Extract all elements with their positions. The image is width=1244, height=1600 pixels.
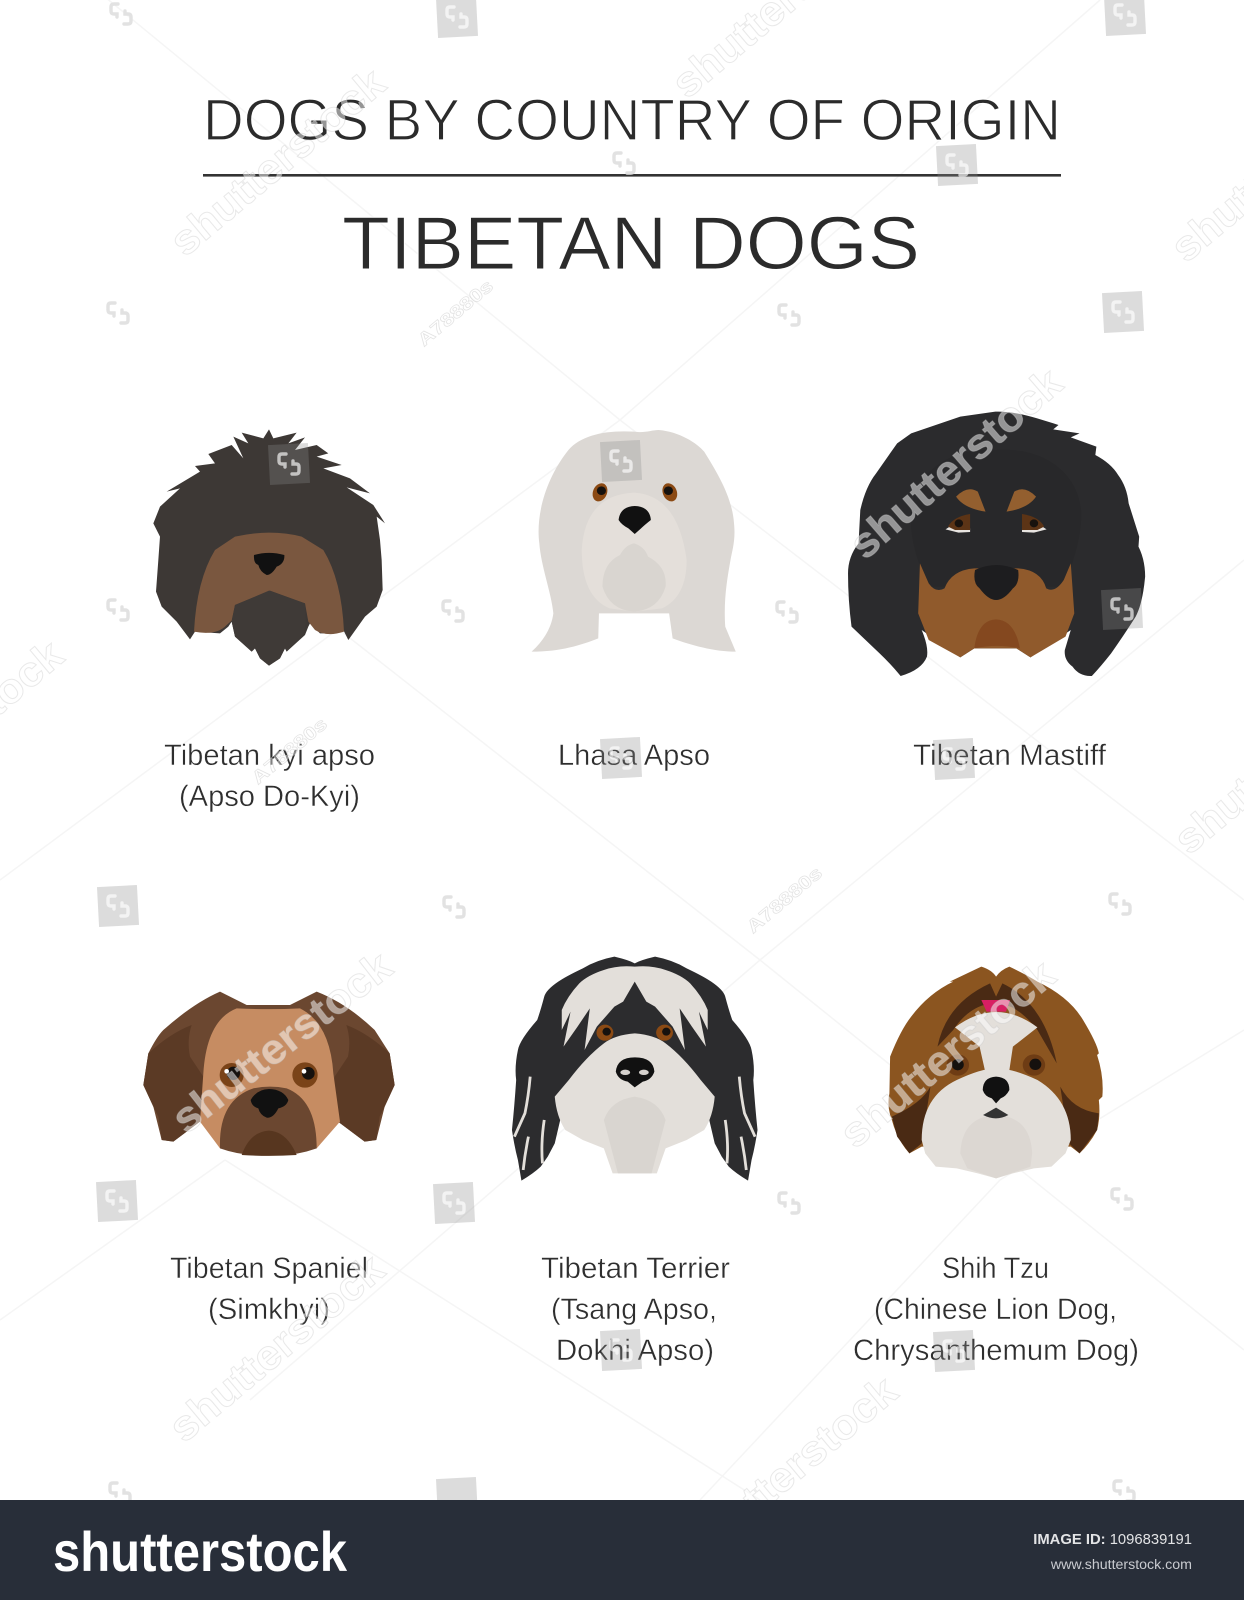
footer logo: shutterstock: [53, 1520, 348, 1583]
label: tibetan terrier: (Tsang Apso,: [551, 1293, 717, 1326]
watermark overlay: shutterstock: [160, 1244, 393, 1451]
watermark overlay: A78880s: [248, 714, 331, 788]
watermark overlay: shutterstock: [673, 1366, 906, 1573]
heading: tibetan dogs: TIBETAN DOGS: [342, 201, 920, 285]
dog icon: tibetan terrier: [512, 957, 758, 1181]
watermark overlay: A78880s: [743, 863, 826, 937]
label: tibetan terrier: Tibetan Terrier: [541, 1252, 730, 1285]
dog icon: tibetan kyi apso: [153, 429, 385, 666]
label: tibetan spaniel: [170, 1252, 368, 1326]
label: shih tzu: Chrysanthemum Dog): [853, 1334, 1139, 1367]
dog icon: tibetan mastiff: [848, 412, 1145, 676]
watermark overlay: shutterstock: [161, 58, 394, 265]
label: tibetan terrier: [541, 1252, 730, 1367]
footer url: www.shutterstock.com: [1050, 1557, 1192, 1573]
label: shih tzu: Shih Tzu: [942, 1252, 1049, 1285]
watermark overlay: shutterstock: [163, 941, 401, 1142]
label: tibetan kyi apso: [164, 739, 375, 813]
dog icon: tibetan spaniel: [143, 992, 395, 1156]
footer image id: IMAGE ID: 1096839191: [1033, 1532, 1192, 1548]
label: tibetan terrier: Dokhi Apso): [556, 1334, 714, 1367]
label: lhasa apso: Lhasa Apso: [558, 739, 710, 772]
label: tibetan kyi apso: (Apso Do-Kyi): [179, 780, 360, 813]
label: shih tzu: [853, 1252, 1139, 1367]
label: tibetan kyi apso: Tibetan kyi apso: [164, 739, 375, 772]
label: tibetan mastiff: Tibetan Mastiff: [913, 739, 1107, 772]
title divider line: [203, 174, 1061, 177]
watermark overlay: shutterstock: [840, 358, 1071, 568]
label: tibetan spaniel: (Simkhyi): [208, 1293, 330, 1326]
watermark overlay: shutterstock: [831, 950, 1064, 1157]
label: shih tzu: (Chinese Lion Dog,: [874, 1293, 1117, 1326]
watermark overlay: A78880s: [414, 276, 497, 350]
dog icon: shih tzu: [888, 967, 1103, 1178]
footer bar: [0, 1500, 1244, 1600]
label: tibetan spaniel: Tibetan Spaniel: [170, 1252, 368, 1285]
title: dogs by country of origin: DOGS BY COUNTRY OF ORIGIN: [203, 88, 1061, 153]
dog icon: lhasa apso: [532, 430, 736, 652]
